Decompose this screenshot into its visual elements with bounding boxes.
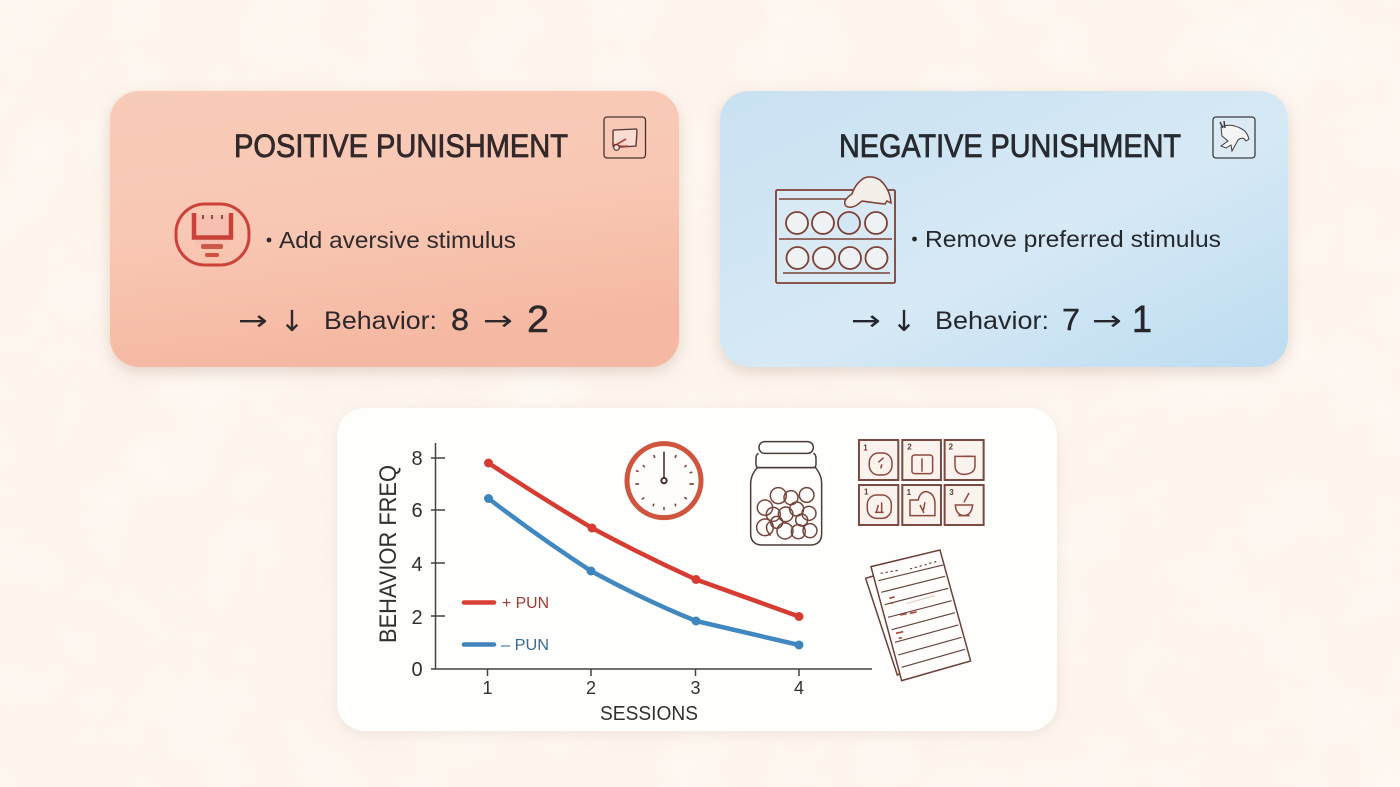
icon: data sheets <box>866 550 971 681</box>
text: behavior 7 to 1: → <box>1092 304 1122 337</box>
x-axis tick labels: 4 <box>794 678 804 698</box>
x-axis tick labels <box>482 678 804 698</box>
text: behavior 7 to 1: → <box>851 304 881 337</box>
text: behavior 8 to 2 <box>238 299 549 341</box>
series: negative punishment <box>484 494 804 650</box>
text: behavior 7 to 1: ↓ <box>892 304 916 338</box>
icon: small framed animal <box>1213 117 1255 158</box>
panel: positive punishment <box>110 91 679 367</box>
icon: picture schedule grid: 1 <box>863 443 868 452</box>
icon: picture schedule grid: 2 <box>949 443 954 452</box>
chart axes <box>431 443 872 676</box>
text: behavior 8 to 2: 2 <box>527 299 549 341</box>
text: behavior 8 to 2: → <box>238 304 268 337</box>
line chart <box>375 443 872 725</box>
y-axis tick labels <box>411 448 423 681</box>
legend: – PUN <box>501 637 549 654</box>
panel: results chart and materials <box>337 408 1057 731</box>
icon: picture schedule grid: 3 <box>949 488 954 497</box>
legend <box>464 595 549 654</box>
legend: + PUN <box>502 595 549 612</box>
y-axis tick labels: 4 <box>411 554 423 576</box>
text: behavior 7 to 1 <box>851 299 1152 341</box>
text: behavior 7 to 1: 7 <box>1062 302 1080 337</box>
y-axis tick labels: 0 <box>411 659 423 681</box>
icon: token board with hand <box>776 177 895 283</box>
text: behavior 8 to 2: Behavior: <box>324 307 437 335</box>
y-axis tick labels: 8 <box>411 448 423 470</box>
panel: negative punishment <box>720 91 1288 367</box>
icon: hand <box>845 177 891 207</box>
icon: picture schedule grid <box>859 440 984 525</box>
text: remove preferred stimulus: Remove preferred stimulus <box>925 226 1221 252</box>
x-axis tick labels: 3 <box>690 678 701 698</box>
x-axis tick labels: 1 <box>482 678 493 698</box>
y-axis title: BEHAVIOR FREQ <box>375 465 402 643</box>
y-axis tick labels: 2 <box>411 607 423 629</box>
icon: small framed device <box>604 117 646 158</box>
text: behavior 8 to 2: → <box>483 304 513 337</box>
icon: picture schedule grid: 1 <box>907 488 912 497</box>
x-axis title: SESSIONS <box>600 703 698 725</box>
icon: picture schedule grid: 2 <box>907 443 912 452</box>
icon: aversive stimulus buzzer <box>176 204 249 265</box>
x-axis tick labels: 2 <box>586 678 596 698</box>
text: add aversive stimulus: Add aversive stimulus <box>279 227 516 253</box>
icon: jar of tokens <box>751 442 822 545</box>
heading: positive punishment: POSITIVE PUNISHMENT <box>234 128 568 164</box>
series: positive punishment <box>484 458 804 621</box>
text: behavior 8 to 2: 8 <box>451 302 469 337</box>
text: behavior 8 to 2: ↓ <box>280 304 304 338</box>
y-axis tick labels: 6 <box>411 500 423 522</box>
text: behavior 7 to 1: Behavior: <box>935 307 1049 335</box>
icon: picture schedule grid: 1 <box>864 487 869 496</box>
heading: negative punishment: NEGATIVE PUNISHMENT <box>839 128 1181 164</box>
icon: clock <box>627 444 701 518</box>
text: behavior 7 to 1: 1 <box>1132 299 1152 341</box>
